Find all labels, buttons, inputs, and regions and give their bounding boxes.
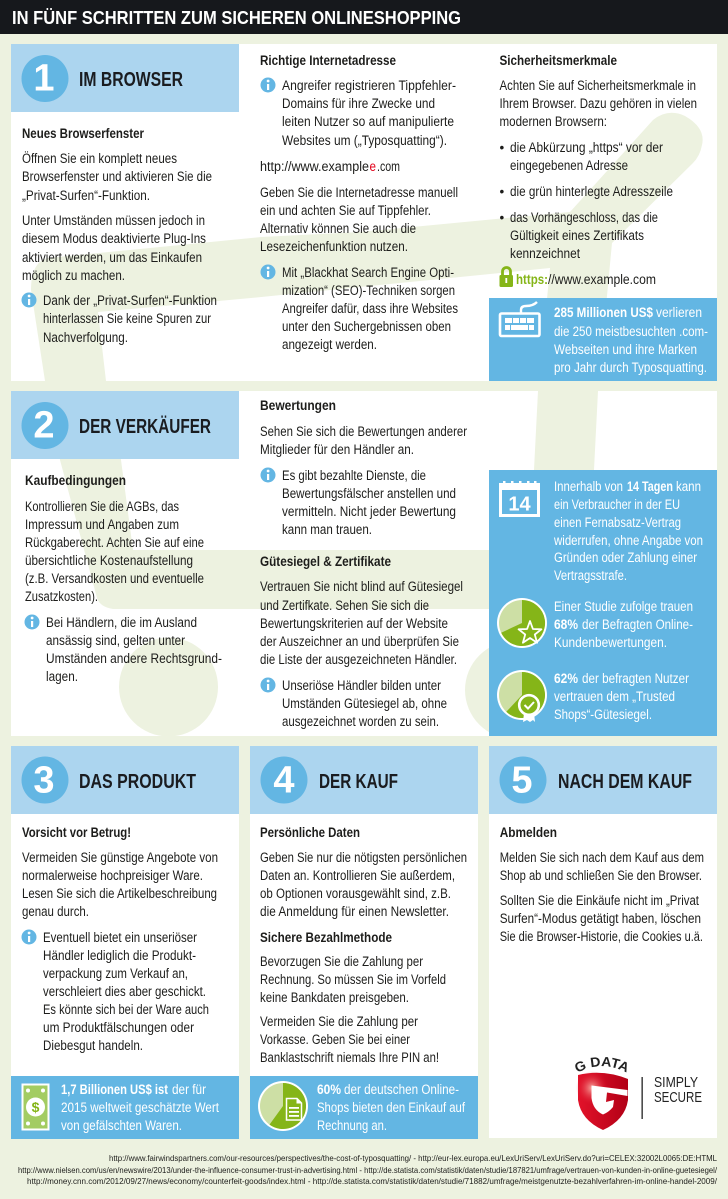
text: 68 percent bbox=[554, 599, 693, 650]
info note: Ausland: lagen. bbox=[46, 669, 78, 684]
logo: G DATA Simply Secure: SIMPLY bbox=[654, 1074, 698, 1091]
step 3 header: 3 bbox=[33, 760, 55, 802]
text: 14 Tagen: ein Verbraucher in der EU bbox=[554, 497, 680, 512]
text block: Sichere Bezahlmethode: keine Bankdaten preisgeben. bbox=[260, 990, 409, 1005]
text: 68 percent: Kundenbewertungen. bbox=[554, 635, 667, 650]
step 4 header: DER KAUF bbox=[319, 770, 398, 793]
info note: Privat-Surfen: Nachverfolgung. bbox=[43, 330, 128, 345]
icon: banknote: $ bbox=[32, 1099, 40, 1115]
text block: Abmelden: Abmelden bbox=[500, 825, 557, 840]
text block: Sicherheitsmerkmale: kennzeichnet bbox=[510, 246, 580, 261]
text: 68 percent: der Befragten Online- bbox=[582, 617, 693, 632]
title bar: IN FÜNF SCHRITTEN ZUM SICHEREN ONLINESHOPPING bbox=[12, 7, 461, 28]
step 2 header: 2 bbox=[33, 404, 55, 446]
step 4 header: 4 bbox=[273, 760, 295, 802]
text block: Internetadresse manuell eingeben: Lesezeichenfunktion nutzen. bbox=[260, 239, 408, 254]
text block: Bewertungen: Mitglieder für den Händler an. bbox=[260, 442, 414, 457]
info note: unseriöse Händler: Umständen Gütesiegel ab, ohne bbox=[282, 696, 447, 711]
callout: counterfeit goods value bbox=[11, 1076, 239, 1139]
info note: bezahlte Dienste: Bewertungsfälscher anstellen und bbox=[282, 486, 456, 501]
text block: Persönliche Daten: die Anmeldung für einen Newsletter. bbox=[260, 904, 449, 919]
step 5 header: NACH DEM KAUF bbox=[558, 770, 692, 793]
info note: bezahlte Dienste: vermitteln. Nicht jeder Bewertung bbox=[282, 504, 456, 519]
text block: Gütesiegel und Zertifikate: die Liste der ausgezeichneten Händler. bbox=[260, 652, 457, 667]
text: 68 percent: Einer Studie zufolge trauen bbox=[554, 599, 693, 614]
text block: Sichere Bezahlmethode: Rechnung. So müssen Sie im Vorfeld bbox=[260, 972, 446, 987]
info note: bezahlte Dienste bbox=[260, 468, 456, 537]
info note: Blackhat SEO bbox=[260, 264, 458, 352]
text: 14 Tagen bbox=[553, 479, 703, 583]
text block: Richtige Internetadresse: leiten Nutzer so auf manipulierte bbox=[282, 114, 454, 129]
callout: Typosquatting: Webseiten und ihre Marken bbox=[554, 342, 697, 357]
text block: Neues Browserfenster: Neues Browserfenster bbox=[22, 126, 145, 141]
callout: purchase on account: 60% bbox=[317, 1082, 341, 1097]
text: 14 Tagen: einen Fernabsatz-Vertrag bbox=[554, 515, 681, 530]
text block: Sichere Bezahlmethode: Banklastschrift niemals Ihre PIN an! bbox=[260, 1050, 439, 1065]
callout: purchase on account: der deutschen Online- bbox=[344, 1082, 459, 1097]
info note: bezahlte Dienste: kann man trauen. bbox=[282, 522, 372, 537]
step 1 header bbox=[11, 44, 239, 112]
logo: G DATA Simply Secure bbox=[575, 1057, 702, 1130]
text block: Sicherheitsmerkmale: eingegebenen Adresse bbox=[510, 158, 628, 173]
text block: Neues Browserfenster bbox=[22, 126, 212, 283]
text block: Persönliche Daten: Geben Sie nur die nötigsten persönlichen bbox=[260, 850, 467, 865]
text block: Gütesiegel und Zertifikate: und Zertifkate. Sehen Sie sich die bbox=[260, 598, 429, 613]
text: 62 percent: vertrauen dem „Trusted bbox=[554, 689, 675, 704]
info note: Produktfälschungen: Es könnte sich bei der Ware auch bbox=[43, 1002, 209, 1017]
text block: Neues Browserfenster: „Privat-Surfen“-Funktion. bbox=[22, 188, 150, 203]
text block: Sicherheitsmerkmale: • bbox=[500, 184, 504, 199]
text: 14 Tagen: 14 Tagen bbox=[627, 479, 673, 494]
info note: Privat-Surfen: Dank der „Privat-Surfen“-Funktion bbox=[43, 293, 217, 308]
text block: Kaufbedingungen: Kontrollieren Sie die AGBs, das bbox=[25, 499, 179, 514]
text block: Vorsicht vor Betrug: Vermeiden Sie günstige Angebote von bbox=[22, 850, 218, 865]
info note: Produktfälschungen: um Produktfälschungen oder bbox=[43, 1020, 194, 1035]
text block: Gütesiegel und Zertifikate: der Auszeichner an und überprüfen Sie bbox=[260, 634, 459, 649]
info note: Blackhat SEO: Angreifer dafür, dass ihre Websites bbox=[282, 301, 458, 316]
step 3 header: DAS PRODUKT bbox=[79, 770, 196, 793]
icon: green lock with https URL: https: bbox=[516, 272, 548, 287]
panel: step 3 das Produkt bbox=[11, 746, 239, 1139]
text block: Gütesiegel und Zertifikate: Vertrauen Sie nicht blind auf Gütesiegel bbox=[260, 579, 463, 594]
info note: Ausland bbox=[24, 614, 222, 684]
text block: Kaufbedingungen bbox=[25, 473, 204, 604]
logo: G DATA Simply Secure: SECURE bbox=[654, 1089, 702, 1106]
text: 62 percent: Shops“-Gütesiegel. bbox=[554, 707, 652, 722]
step 5 header bbox=[489, 746, 717, 814]
text block: Kaufbedingungen: (z.B. Versandkosten und eventuelle bbox=[25, 571, 204, 586]
info note: Produktfälschungen bbox=[22, 930, 209, 1053]
callout: Typosquatting bbox=[489, 298, 717, 381]
title bar bbox=[0, 0, 728, 34]
text block: Vorsicht vor Betrug: normalerweise hochpreisiger Ware. bbox=[22, 868, 203, 883]
info note: Ausland: Bei Händlern, die im Ausland bbox=[46, 615, 197, 630]
text block: Neues Browserfenster: aktiviert werden, um das Einkaufen bbox=[22, 250, 202, 265]
panel: step 4 der Kauf bbox=[250, 746, 478, 1139]
text block: Bewertungen: Sehen Sie sich die Bewertungen anderer bbox=[260, 424, 467, 439]
text: 62 percent: der befragten Nutzer bbox=[582, 671, 689, 686]
step 5 header: 5 bbox=[511, 760, 533, 802]
text: 14 Tagen: kann bbox=[676, 479, 701, 494]
text block: Richtige Internetadresse: Domains für ihre Zwecke und bbox=[282, 96, 435, 111]
icon: calendar 14: 14 bbox=[508, 494, 531, 516]
text block: Sicherheitsmerkmale: • bbox=[500, 140, 504, 155]
text: 14 Tagen: Gründen oder Zahlung einer bbox=[554, 550, 697, 565]
step 1 header: 1 bbox=[33, 58, 55, 100]
text block: Sicherheitsmerkmale bbox=[500, 53, 697, 261]
text block: Neues Browserfenster: Unter Umständen müssen jedoch in bbox=[22, 213, 205, 228]
callout: counterfeit goods value: von gefälschten Waren. bbox=[61, 1118, 182, 1133]
text block: Sichere Bezahlmethode bbox=[260, 930, 446, 1065]
text block: Vorsicht vor Betrug bbox=[22, 825, 218, 919]
icon: calendar 14 bbox=[499, 481, 540, 516]
example typo URL: http://www.example bbox=[260, 159, 369, 174]
step 4 header bbox=[250, 746, 478, 814]
text block: Vorsicht vor Betrug: Lesen Sie sich die Artikelbeschreibung bbox=[22, 886, 217, 901]
text: 62 percent: 62% bbox=[554, 671, 578, 686]
callout: purchase on account: Shops bieten den Einkauf auf bbox=[317, 1100, 465, 1115]
icon: green lock with https URL: //www.example.com bbox=[548, 272, 656, 287]
info note: Blackhat SEO: Mit „Blackhat Search Engine Opti- bbox=[282, 265, 454, 280]
text block: Sichere Bezahlmethode: Sichere Bezahlmethode bbox=[260, 930, 392, 945]
step 3 header bbox=[11, 746, 239, 814]
text block: Persönliche Daten bbox=[260, 825, 467, 919]
text block: Internetadresse manuell eingeben: ein und achten Sie auf Tippfehler. bbox=[260, 203, 431, 218]
text block: Vorsicht vor Betrug: genau durch. bbox=[22, 904, 89, 919]
text block: Kaufbedingungen: Zusatzkosten). bbox=[25, 589, 98, 604]
background shopping cart illustration bbox=[31, 113, 703, 739]
text: 68 percent: 68% bbox=[554, 617, 578, 632]
callout: purchase on account bbox=[250, 1076, 478, 1139]
text block: Sicherheitsmerkmale: Gültigkeit eines Zertifikats bbox=[510, 228, 644, 243]
pie chart: 62 percent with seal bbox=[497, 670, 547, 722]
text block: Internetadresse manuell eingeben: Geben Sie die Internetadresse manuell bbox=[260, 185, 458, 200]
info note: Produktfälschungen: verpackung zum Verkauf an, bbox=[43, 966, 188, 981]
logo: G DATA Simply Secure: G DATA bbox=[575, 1057, 627, 1072]
text block: Sicherheitsmerkmale: die Abkürzung „https“ vor der bbox=[510, 140, 663, 155]
text: 14 Tagen: Vertragsstrafe. bbox=[554, 568, 627, 583]
text: 14 Tagen: widerrufen, ohne Angabe von bbox=[553, 533, 703, 548]
callout: counterfeit goods value: 1,7 Billionen US$ ist bbox=[61, 1082, 168, 1097]
text block: Gütesiegel und Zertifikate: Gütesiegel & Zertifikate bbox=[260, 554, 391, 569]
text block: Neues Browserfenster: Browserfenster und aktivieren Sie die bbox=[22, 169, 212, 184]
text block: Gütesiegel und Zertifikate: Bewertungskriterien auf der Website bbox=[260, 616, 448, 631]
text block: Richtige Internetadresse: Websites um („Typosquatting“). bbox=[282, 133, 447, 148]
text block: Kaufbedingungen: Kaufbedingungen bbox=[25, 473, 126, 488]
text block: Sicherheitsmerkmale: das Vorhängeschloss, das die bbox=[510, 210, 658, 225]
example typo URL: .com bbox=[377, 159, 400, 174]
callout: counterfeit goods value: 2015 weltweit geschätzte Wert bbox=[61, 1100, 219, 1115]
info note: Blackhat SEO: unter den Suchergebnissen oben bbox=[282, 319, 451, 334]
text block: Sichere Bezahlmethode: Bevorzugen Sie die Zahlung per bbox=[260, 954, 423, 969]
text: 14 Tagen: Innerhalb von bbox=[554, 479, 623, 494]
info note: Privat-Surfen: hinterlassen Sie keine Spuren zur bbox=[43, 311, 211, 326]
callout: Typosquatting: 285 Millionen US$ bbox=[554, 305, 653, 320]
text block: Sicherheitsmerkmale: die grün hinterlegte Adresszeile bbox=[510, 184, 673, 199]
text block: Sicherheitsmerkmale: • bbox=[500, 210, 504, 225]
text block: Abmelden bbox=[500, 825, 704, 944]
step 1 header: IM BROWSER bbox=[79, 68, 183, 91]
callout: counterfeit goods value: der für bbox=[172, 1082, 206, 1097]
info note: Blackhat SEO: mization“ (SEO)-Techniken sorgen bbox=[282, 283, 455, 298]
info note: Blackhat SEO: angezeigt werden. bbox=[282, 337, 377, 352]
text block: Sichere Bezahlmethode: Vorkasse. Geben Sie bei einer bbox=[260, 1032, 410, 1047]
info note: Privat-Surfen bbox=[22, 292, 217, 345]
panel: step 5 nach dem Kauf bbox=[489, 746, 717, 1130]
pie chart: 68 percent with star bbox=[497, 598, 547, 648]
text block: Internetadresse manuell eingeben bbox=[260, 185, 458, 254]
pie chart: 60 percent with document bbox=[258, 1081, 308, 1131]
text block: Kaufbedingungen: Impressum und Angaben zum bbox=[25, 517, 179, 532]
info note: unseriöse Händler: Unseriöse Händler bilden unter bbox=[282, 678, 441, 693]
text block: Neues Browserfenster: möglich zu machen. bbox=[22, 268, 125, 283]
info note: Ausland: ansässig sind, gelten unter bbox=[46, 633, 185, 648]
text block: Kaufbedingungen: übersichtliche Kostenaufstellung bbox=[25, 553, 193, 568]
text block: Abmelden: Surfen“-Modus getätigt haben, löschen bbox=[500, 911, 701, 926]
text block: Bewertungen: Bewertungen bbox=[260, 398, 336, 413]
text block: Richtige Internetadresse: Richtige Internetadresse bbox=[260, 53, 396, 68]
text block: Neues Browserfenster: diesem Modus deaktivierte Plug-Ins bbox=[22, 231, 206, 246]
info note: Produktfälschungen: Eventuell bietet ein unseriöser bbox=[43, 930, 197, 945]
text: 62 percent bbox=[554, 671, 689, 722]
text block: Bewertungen bbox=[260, 398, 467, 457]
step 2 header bbox=[11, 391, 239, 459]
icon: banknote bbox=[22, 1084, 48, 1130]
text block: Vorsicht vor Betrug: Vorsicht vor Betrug! bbox=[22, 825, 131, 840]
text block: Sicherheitsmerkmale: Sicherheitsmerkmale bbox=[500, 53, 617, 68]
example typo URL: e bbox=[370, 159, 376, 174]
icon: keyboard bbox=[500, 302, 540, 336]
text block: Sicherheitsmerkmale: modernen Browsern: bbox=[500, 114, 607, 129]
source links bbox=[18, 1153, 718, 1186]
text block: Persönliche Daten: Daten an. Kontrollieren Sie außerdem, bbox=[260, 868, 455, 883]
text block: Sicherheitsmerkmale: Ihrem Browser. Dazu gehören in vielen bbox=[500, 96, 697, 111]
step 2 header: DER VERKÄUFER bbox=[79, 415, 211, 438]
info note: Ausland: Umständen andere Rechtsgrund- bbox=[46, 651, 222, 666]
text block: Persönliche Daten: Persönliche Daten bbox=[260, 825, 360, 840]
text block: Gütesiegel und Zertifikate bbox=[260, 554, 463, 667]
info note: Produktfälschungen: Diebesgut handeln. bbox=[43, 1038, 143, 1053]
icon: green lock with https URL bbox=[500, 268, 656, 287]
callout: Typosquatting: verlieren bbox=[656, 305, 702, 320]
info note: bezahlte Dienste: Es gibt bezahlte Dienste, die bbox=[282, 468, 426, 483]
panel: step 1 im Browser bbox=[11, 44, 717, 381]
info note: unseriöse Händler: ausgezeichnet worden zu sein. bbox=[282, 714, 439, 729]
info note: unseriöse Händler bbox=[260, 678, 447, 729]
info note: Produktfälschungen: Händler lediglich die Produkt- bbox=[43, 948, 196, 963]
text block: Internetadresse manuell eingeben: Alternativ können Sie auch die bbox=[260, 221, 416, 236]
callout: purchase on account: Rechnung an. bbox=[317, 1118, 387, 1133]
info note: Produktfälschungen: verschleiert dies aber geschickt. bbox=[43, 984, 206, 999]
callout: Typosquatting: pro Jahr durch Typosquatting. bbox=[554, 360, 707, 375]
text block: Sichere Bezahlmethode: Vermeiden Sie die Zahlung per bbox=[260, 1014, 418, 1029]
text block: Sicherheitsmerkmale: Achten Sie auf Sicherheitsmerkmale in bbox=[500, 78, 696, 93]
text block: Richtige Internetadresse bbox=[260, 53, 456, 148]
text block: Neues Browserfenster: Öffnen Sie ein komplett neues bbox=[22, 151, 177, 166]
panel: step 2 der Verkäufer bbox=[11, 391, 717, 736]
text block: Richtige Internetadresse: Angreifer registrieren Tippfehler- bbox=[282, 78, 456, 93]
callout: statistics column bbox=[489, 470, 717, 736]
text block: Kaufbedingungen: Rückgaberecht. Achten Sie auf eine bbox=[25, 535, 204, 550]
text block: Persönliche Daten: ob Optionen vorausgewählt sind, z.B. bbox=[260, 886, 451, 901]
